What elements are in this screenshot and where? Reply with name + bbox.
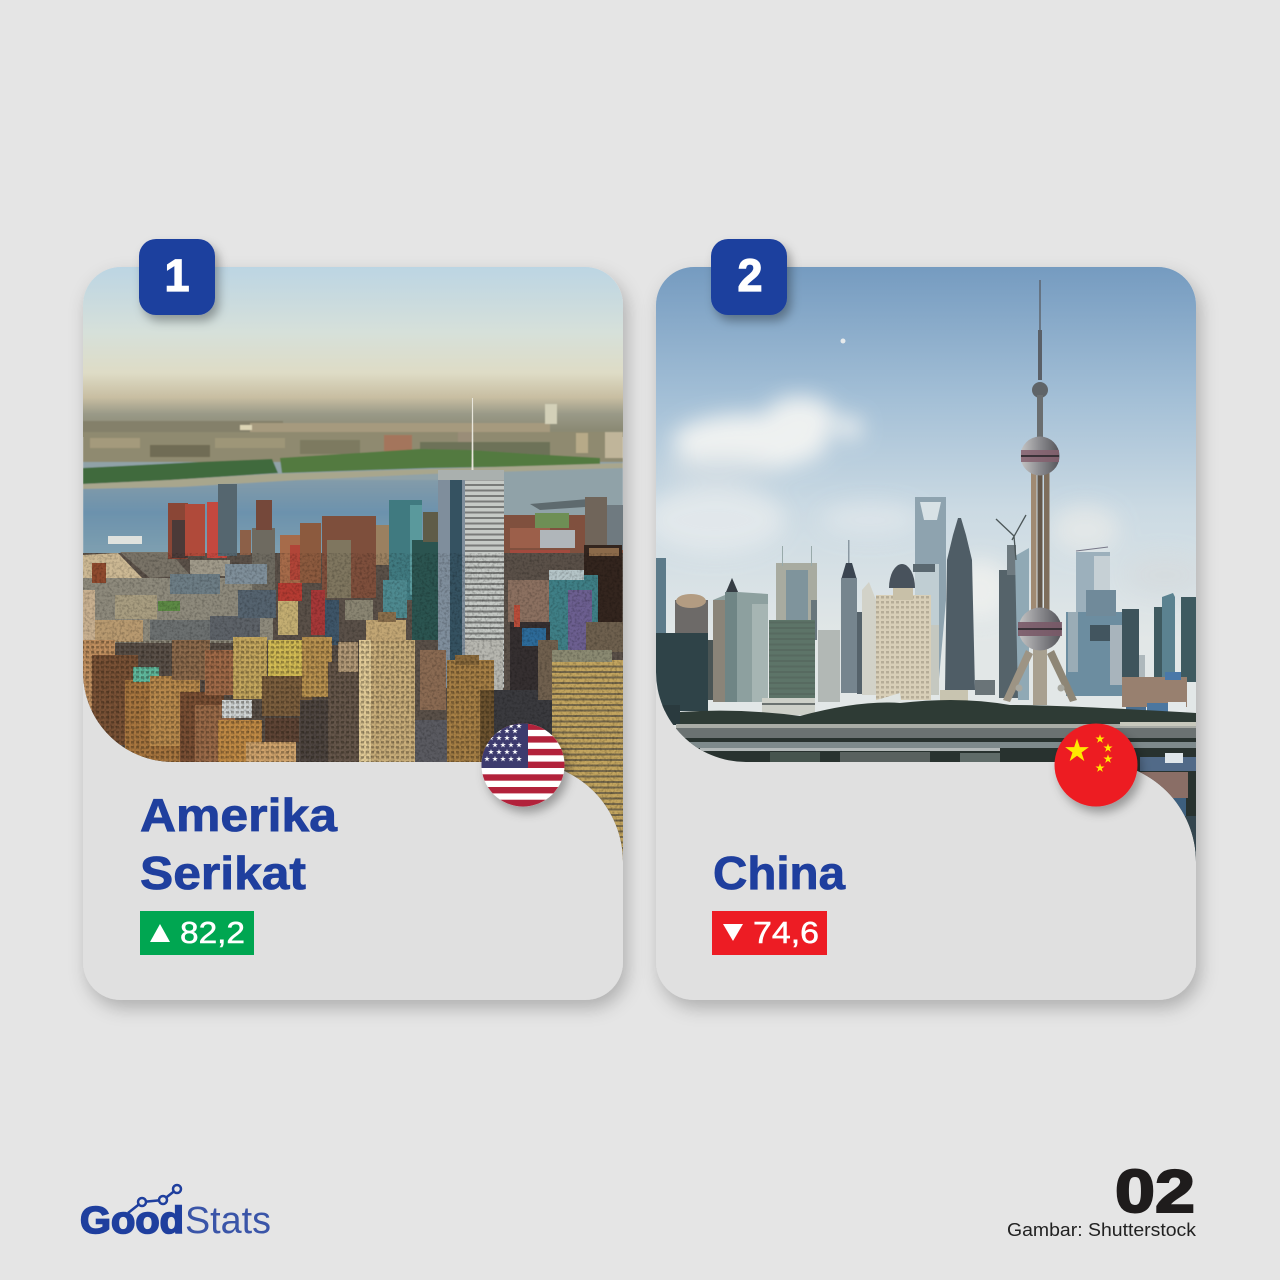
icon: USA flag [480,722,566,807]
rank badge 1 [139,239,215,315]
score badge: down 74,6 [712,911,827,955]
image credit: Gambar: Shutterstock [1007,1220,1197,1240]
right towers [508,580,552,622]
foreground blocks right [447,660,494,762]
logo: GoodStats [80,1185,271,1242]
card base [83,267,623,1000]
far city [384,435,412,451]
window texture overlay [83,640,494,762]
foreground skyscrapers [656,633,708,711]
score badge: up 82,2: 82,2 [180,915,245,950]
logo: GoodStats: Stats [185,1200,271,1242]
score badge: up 82,2 [140,911,254,955]
trees and promenade [1147,703,1168,712]
distant skyscrapers [656,558,666,638]
small mid-ground buildings [115,595,157,619]
rank badge 2: 2 [737,250,763,301]
photo: Shanghai skyline [645,267,1205,868]
title: China: China [713,847,845,899]
green riverbank [83,459,278,484]
main tower [472,398,474,476]
card base [656,267,1196,1000]
low city right of river [504,515,623,553]
beige skyscraper [371,640,415,762]
title: Amerika Serikat: Serikat [140,847,306,899]
piers and left ground [83,553,623,873]
teal towers [389,500,422,600]
photo: New York skyline [83,267,623,873]
panel: China [645,239,1205,1000]
title: Amerika Serikat [140,789,337,899]
foreground blocks left [83,640,115,710]
striped corner building [552,660,623,870]
panel: Amerika Serikat [83,239,623,1000]
logo: GoodStats: Good [80,1200,184,1242]
title: Amerika Serikat: Amerika [140,789,337,841]
infographic canvas [78,239,1209,1236]
mid towers [252,528,275,593]
Oriental Pearl Tower [1003,280,1077,705]
water reflections [1140,757,1196,771]
rank badge 2 [711,239,787,315]
page number: 02 [1115,1158,1195,1225]
red towers [168,503,188,559]
score badge: down 74,6: 74,6 [753,915,819,950]
icon: China flag [1054,724,1138,806]
rank badge 1: 1 [164,250,190,301]
